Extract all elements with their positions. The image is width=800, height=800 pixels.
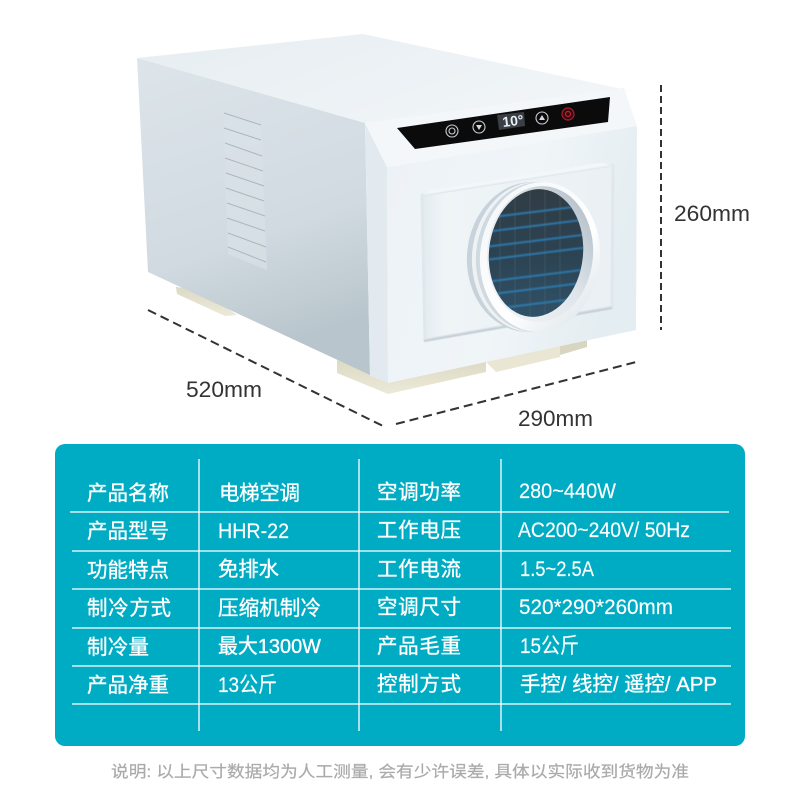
row: cooling capacity: 产品毛重 [377, 635, 461, 658]
row: product name [87, 479, 617, 505]
control panel: 10° [501, 112, 524, 130]
row: product name: 电梯空调 [219, 482, 300, 505]
control panel [397, 97, 610, 149]
dimension line: width [396, 361, 640, 424]
row: model: 工作电压 [377, 519, 461, 542]
dimension line: height [660, 85, 662, 330]
dimension label: 520mm: 520mm [186, 377, 262, 402]
row: features: 1.5~2.5A [520, 557, 595, 581]
row: cooling method: 压缩机制冷 [218, 597, 321, 620]
row: net weight: 控制方式 [377, 673, 461, 696]
coil fins [488, 189, 584, 317]
row: cooling method [87, 595, 673, 620]
duct flange [422, 163, 613, 341]
side vent slots [223, 112, 267, 270]
row: product name: 产品名称 [87, 482, 169, 505]
top face [137, 34, 632, 123]
row: cooling method: 制冷方式 [87, 597, 171, 620]
row: cooling capacity [87, 634, 579, 659]
row: cooling method: 空调尺寸 [377, 596, 461, 619]
footnote: 说明: 以上尺寸数据均为人工测量, 会有少许误差, 具体以实际收到货物为准 [111, 763, 689, 781]
row: model: 产品型号 [87, 520, 169, 543]
row: cooling capacity: 制冷量 [87, 636, 149, 659]
dimension label: 290mm: 290mm [518, 406, 593, 431]
front corner strip [365, 123, 388, 383]
display [497, 112, 525, 130]
product: elevator air conditioner unit [137, 34, 637, 394]
buttons [446, 112, 548, 137]
row: cooling capacity: 15公斤 [520, 634, 579, 658]
dimension line: length [148, 310, 385, 427]
row: features: 免排水 [218, 558, 279, 581]
row: model: HHR-22 [218, 519, 289, 543]
row: net weight [87, 673, 717, 697]
side face [137, 58, 370, 375]
row: net weight: 13公斤 [218, 673, 277, 697]
front face [387, 126, 637, 383]
upper chamfer [365, 88, 637, 167]
row: product name: 空调功率 [377, 481, 461, 504]
row: model [87, 518, 690, 543]
dimension label: 260mm: 260mm [674, 201, 750, 226]
row: net weight: 产品净重 [87, 674, 169, 697]
spec table panel [55, 444, 745, 746]
row: model: AC200~240V/ 50Hz [518, 518, 690, 542]
feet [176, 287, 587, 394]
row: features: 工作电流 [377, 558, 461, 581]
row: cooling capacity: 最大1300W [218, 635, 322, 658]
row: features [87, 557, 595, 582]
duct ring [467, 182, 600, 332]
row: cooling method: 520*290*260mm [519, 595, 673, 619]
row: features: 功能特点 [87, 559, 169, 582]
row: product name: 280~440W [519, 479, 617, 503]
row: net weight: 手控/ 线控/ 遥控/ APP [520, 673, 717, 696]
